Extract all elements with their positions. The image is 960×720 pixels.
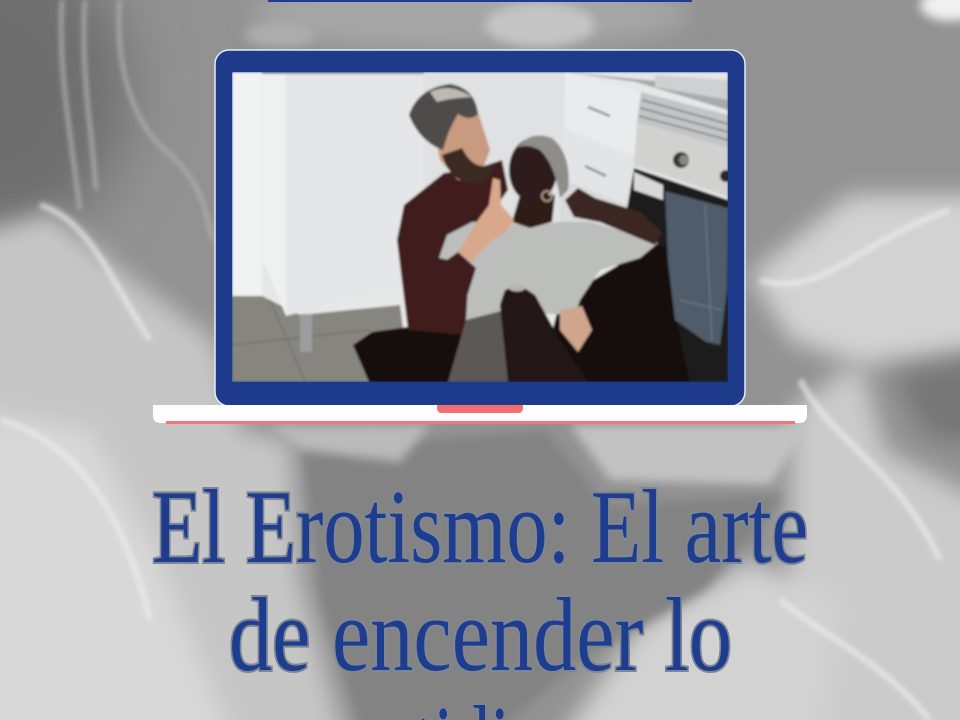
title xyxy=(152,468,808,720)
photo: couple on kitchen floor xyxy=(232,72,732,382)
title line 2: de encender lo xyxy=(229,576,732,693)
trackpad notch xyxy=(437,405,523,413)
laptop base xyxy=(153,405,807,423)
top bar: cropped blue edge xyxy=(268,0,692,2)
laptop screen frame xyxy=(215,50,745,406)
base underline xyxy=(166,421,795,424)
laptop mockup xyxy=(153,50,807,424)
